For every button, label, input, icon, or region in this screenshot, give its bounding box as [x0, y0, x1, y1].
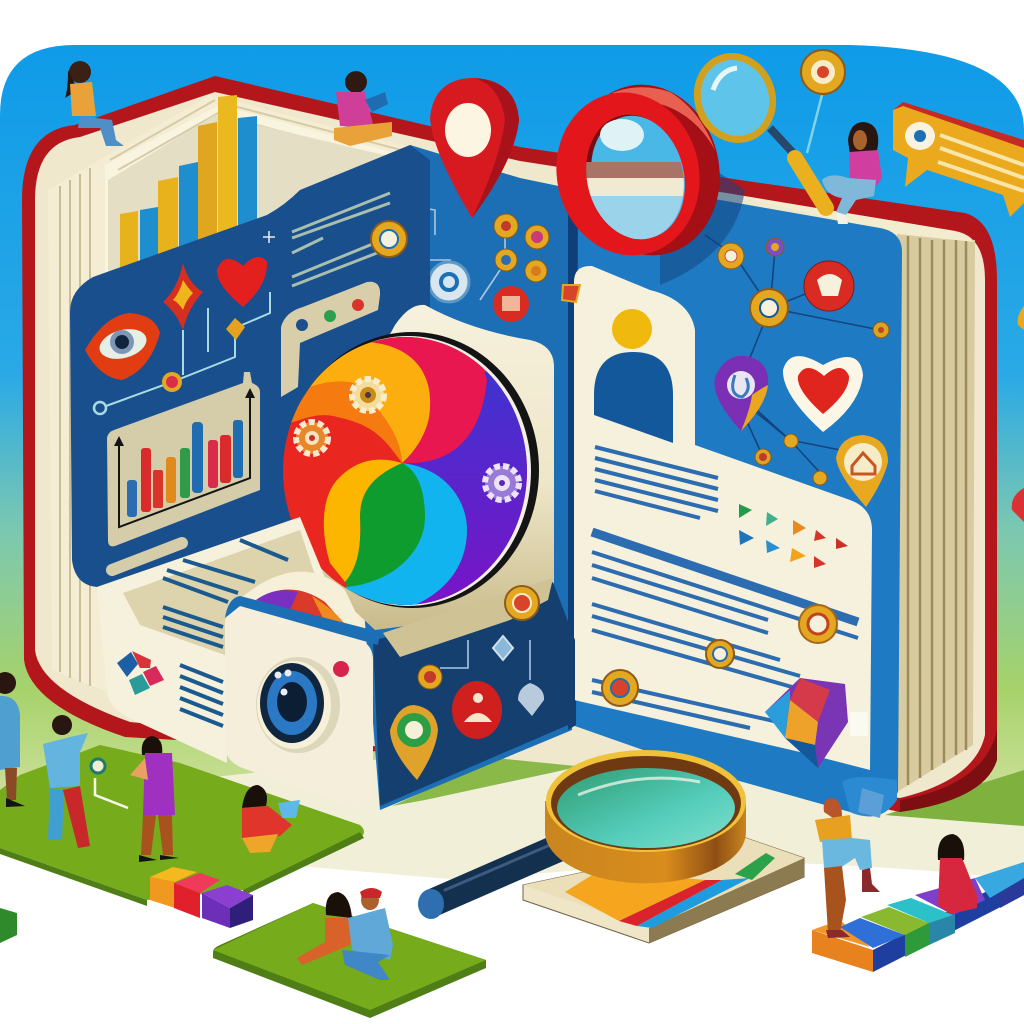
- icon: red badge: [452, 681, 502, 739]
- small coloured triangles: [739, 504, 848, 568]
- icon: colour tile: [117, 651, 164, 695]
- small pin on top: [801, 50, 845, 153]
- person: top left sitting: [65, 61, 124, 146]
- standing person right: [815, 788, 884, 938]
- profile avatar icon: [594, 309, 673, 443]
- person: top middle reading: [334, 71, 392, 146]
- person 4 sitting: [242, 785, 300, 853]
- chart card: [107, 372, 260, 546]
- center fold lower navy section: [373, 578, 575, 806]
- icon: small diamond: [226, 318, 245, 340]
- caption bar: [112, 543, 182, 570]
- person: top right sitting: [822, 122, 882, 224]
- icon: heart: [217, 257, 267, 307]
- person 2: [43, 715, 90, 848]
- left page lower panel and text: [97, 517, 330, 763]
- right page: blue panel: [572, 170, 902, 816]
- large red magnifier: [556, 84, 720, 256]
- left folder panel: [70, 145, 430, 587]
- icon: purple map pin: [714, 356, 768, 431]
- folder text lines: [292, 193, 390, 286]
- network of icons on right page: [705, 235, 889, 507]
- center fold icons and circuit: [405, 205, 580, 322]
- book: red cover: [22, 76, 997, 812]
- right page: cream card: [574, 266, 872, 770]
- red map pin: [430, 78, 519, 218]
- colour block stairs left: [150, 867, 253, 928]
- circuit: [106, 292, 270, 406]
- icon: gold badge on folder: [371, 221, 407, 257]
- icon: heart badge: [783, 356, 863, 432]
- left page: bar chart: [108, 95, 405, 340]
- couple on grass: [297, 888, 393, 980]
- group of people bottom left: [0, 672, 300, 862]
- person 1: [0, 672, 25, 807]
- icon: four point star: [163, 263, 203, 330]
- icon: gold map pin: [836, 435, 888, 507]
- disc emblem: red: [296, 422, 328, 454]
- disc emblem: gold: [352, 379, 384, 411]
- book: left page edges: [48, 95, 420, 740]
- text lines middle: [592, 532, 858, 728]
- book under magnifier: [523, 838, 804, 943]
- book: right page edges: [720, 192, 975, 792]
- icon: speech bubble top right: [893, 102, 1024, 217]
- sitting person right: [938, 834, 977, 914]
- cream panel under rainbow: [300, 305, 554, 630]
- colour block stairs right: [812, 862, 1024, 972]
- disc emblem: purple: [485, 466, 519, 500]
- text lines upper: [595, 447, 718, 518]
- grass platforms: [0, 745, 486, 1018]
- center fold: blue panel: [360, 145, 578, 810]
- icon: coloured gem: [765, 678, 868, 768]
- camera: [225, 572, 380, 808]
- speech card: [281, 282, 380, 397]
- large gold magnifier: [418, 750, 804, 943]
- icon: gold pin: [390, 705, 438, 780]
- top small magnifier: [686, 46, 845, 208]
- icon: small ring callout left: [91, 759, 128, 808]
- gold badges on the card: [602, 605, 837, 706]
- rainbow disc: [283, 332, 539, 608]
- icon: eye: [85, 313, 160, 380]
- person 3: [130, 736, 179, 862]
- right edge partial icons: [1012, 306, 1024, 522]
